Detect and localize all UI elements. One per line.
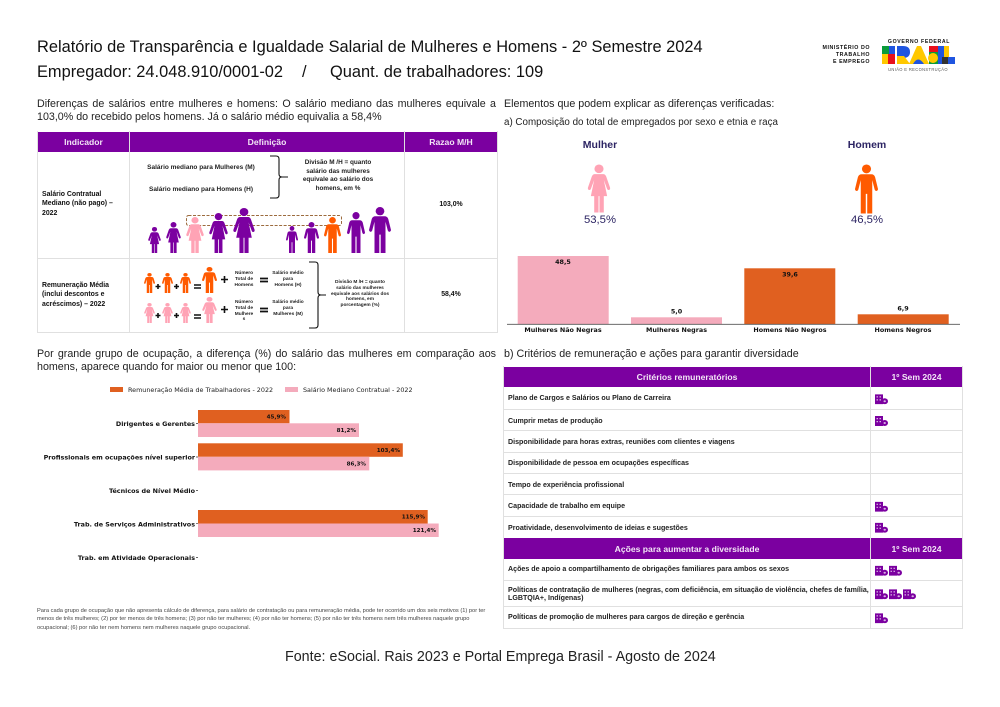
row: promoção: Políticas de promoção de mulheres para cargos de direção e gerência — [508, 613, 744, 621]
table header: ações — [504, 538, 870, 559]
value: 53,5%: 53,5% — [584, 214, 616, 226]
definition text: divisão: Divisão M /H = quanto — [305, 159, 371, 166]
formula text: salário médio homens — [272, 270, 304, 288]
chart legend: Remuneração Média de Trabalhadores - 2022 — [128, 386, 273, 394]
row label: salário contratual: Salário Contratual — [42, 190, 101, 198]
row: plano de cargos: Plano de Cargos e Salários ou Plano de Carreira — [508, 394, 671, 402]
heading: occupation groups: homens, aparece quando for maior ou menor que 100: — [37, 361, 296, 373]
definition text: divisão: equivale ao salário dos — [303, 176, 373, 183]
ministry logo text: TRABALHO — [836, 52, 870, 58]
footnote: menos de três mulheres; (2) por ter menos de três homens; (3) por não ter mulheres; (4) por não ter homens; (5) por não ter três homens nem três mulheres naquele grupo — [37, 616, 469, 622]
column chart: composition: Homens Não Negros — [753, 326, 827, 334]
icons: table markers — [875, 394, 916, 624]
panel: indicator table — [37, 131, 498, 333]
formula text: salário médio homens: para — [283, 277, 293, 282]
row label: salário contratual — [42, 190, 113, 216]
formula text: divisão — [331, 280, 389, 308]
intro text: salary differences: 103,0% do recebido pelos homens. Já o salário médio equivalia a 58,4% — [37, 111, 382, 123]
chart legend: Salário Mediano Contratual - 2022 — [303, 386, 413, 394]
title: Relatório de Transparência e Igualdade Salarial de Mulheres e Homens - 2º Semestre 2024 — [37, 38, 703, 56]
table header: semestre 2: 1º Sem 2024 — [892, 544, 941, 554]
bar chart: occupation groups: 81,2% — [337, 428, 356, 434]
brace — [270, 156, 288, 198]
bar chart: occupation groups: Trab. em Atividade Operacionais — [78, 554, 195, 562]
formula text: salário médio mulheres: Salário médio — [272, 300, 304, 305]
row: contratação: LGBTQIA+, Indígenas) — [508, 594, 583, 602]
row: disponibilidade pessoa: Disponibilidade de pessoa em ocupações específicas — [508, 458, 689, 466]
chart legend — [110, 386, 413, 394]
title — [37, 38, 703, 81]
label: homem: Homem — [848, 139, 886, 151]
bar chart: occupation groups: Dirigentes e Gerentes — [116, 420, 195, 428]
formula text: divisão: Divisão M /H = quanto — [335, 280, 385, 285]
bar chart: occupation groups: 121,4% — [413, 528, 436, 534]
formula text: salário médio mulheres: Mulheres (M) — [273, 312, 303, 317]
table header: indicador — [38, 132, 129, 152]
column chart: composition: 5,0 — [671, 307, 683, 315]
formula text: número total de homens: Número — [235, 271, 253, 276]
formula text: número total de homens: Total de — [235, 277, 253, 282]
bar chart: occupation groups: Técnicos de Nível Médio — [109, 487, 196, 495]
ministry logo text — [822, 44, 870, 65]
formula text: número total de mulheres — [235, 300, 253, 322]
heading: occupation groups — [37, 348, 496, 373]
column chart: composition: 39,6 — [782, 270, 798, 278]
column chart: composition: Mulheres Não Negras — [524, 326, 602, 334]
intro text: salary differences: Diferenças de salários entre mulheres e homens: O salário mediano das mulheres equivale a — [37, 98, 496, 110]
subheading b: b) Critérios de remuneração e ações para garantir diversidade — [504, 348, 799, 360]
brace 2 — [309, 262, 326, 328]
label: mulher: Mulher — [583, 139, 617, 151]
row: capacidade: Capacidade de trabalho em equipe — [508, 502, 625, 510]
formula text: divisão: equivale aos salários dos — [331, 292, 389, 297]
government logo — [882, 39, 955, 72]
formula text: número total de mulheres: Número — [235, 300, 253, 305]
definition text: divisão: salário das mulheres — [306, 168, 370, 175]
ministry logo text: E EMPREGO — [833, 59, 870, 65]
table header: ações: Ações para aumentar a diversidade — [615, 544, 759, 554]
bar chart: occupation groups — [44, 410, 439, 562]
table header: razão — [405, 132, 497, 152]
formula text: divisão: porcentagem (%) — [341, 303, 379, 308]
column chart: composition: 48,5 — [555, 258, 571, 266]
heading: occupation groups: Por grande grupo de ocupação, a diferença (%) do salário das mulheres em comparação aos — [37, 348, 496, 360]
icons: men average formula — [144, 267, 228, 293]
table header: semestre — [871, 367, 962, 387]
table header: definição: Definição — [248, 137, 286, 147]
value: 46,5%: 46,5% — [851, 214, 883, 226]
row label: remuneração média: Remuneração Média (inclui descontos e acréscimos) – 2022 — [42, 282, 109, 308]
heading: elements: Elementos que podem explicar as diferenças verificadas: — [504, 98, 774, 110]
government logo: UNIÃO E RECONSTRUÇÃO — [888, 67, 948, 72]
government logo: GOVERNO FEDERAL — [888, 39, 950, 45]
row: metas: Cumprir metas de produção — [508, 416, 603, 424]
row label: salário contratual: Mediano (não pago) – — [42, 200, 113, 207]
row: contratação — [508, 586, 869, 602]
table header: critérios: Critérios remuneratórios — [637, 372, 737, 382]
intro text: salary differences — [37, 98, 496, 123]
title: Quant. de trabalhadores: 109 — [330, 63, 543, 81]
title: Empregador: 24.048.910/0001-02 — [37, 63, 283, 81]
row: experiência: Tempo de experiência profissional — [508, 480, 624, 488]
bar chart: occupation groups: 45,9% — [267, 415, 286, 421]
formula text: divisão: salário das mulheres — [336, 286, 384, 291]
table header: indicador: Indicador — [64, 137, 103, 147]
icons: women and men salary ranking — [148, 207, 391, 253]
formula text: número total de mulheres: Mulhere — [235, 312, 253, 317]
subheading a: a) Composição do total de empregados por sexo e etnia e raça — [504, 117, 778, 128]
formula text: salário médio mulheres — [272, 300, 304, 317]
formula text: número total de homens — [234, 270, 254, 288]
panel: criteria table — [503, 366, 963, 629]
table header: definição — [130, 132, 404, 152]
formula text: salário médio homens: Salário médio — [272, 271, 304, 276]
formula text: divisão: homens, em — [346, 297, 374, 302]
icon: man — [855, 164, 878, 214]
definition text: mulheres: Salário mediano para Mulheres (M) — [147, 164, 255, 170]
icon: woman — [588, 164, 610, 212]
footnote — [37, 608, 486, 631]
bar chart: occupation groups: Profissionais em ocupações nível superior — [44, 454, 196, 462]
source: Fonte: eSocial. Rais 2023 e Portal Emprega Brasil - Agosto de 2024 — [285, 649, 716, 665]
formula text: salário médio homens: Homens (H) — [275, 283, 301, 288]
ministry logo text: MINISTÉRIO DO — [823, 45, 870, 51]
column chart: composition — [507, 256, 960, 334]
value: razão remuneração: 58,4% — [441, 291, 461, 298]
title: / — [302, 63, 307, 81]
value: razão salário contratual: 103,0% — [439, 201, 463, 208]
definition text: divisão — [303, 159, 373, 192]
table header: razão: Razao M/H — [429, 137, 473, 147]
footnote: ocupacional; (6) por não ter nem homens nem mulheres naquele grupo ocupacional. — [37, 625, 250, 631]
column chart: composition: Homens Negros — [875, 326, 932, 334]
bar chart: occupation groups: 103,4% — [377, 448, 400, 454]
bar chart: occupation groups: 86,3% — [347, 462, 366, 468]
dashed highlight — [186, 215, 342, 226]
definition text: divisão: homens, em % — [316, 185, 360, 192]
table header: critérios — [504, 367, 870, 387]
row label: salário contratual: 2022 — [42, 210, 57, 216]
row: apoio: Ações de apoio a compartilhamento de obrigações familiares para ambos os sexos — [508, 565, 789, 573]
icons: women average formula — [144, 297, 228, 323]
formula text: número total de mulheres: Total de — [235, 306, 253, 311]
bar chart: occupation groups: Trab. de Serviços Administrativos — [74, 520, 195, 528]
row: contratação: Políticas de contratação de mulheres (negras, com deficiência, em situação de violência, chefes de família, — [508, 586, 869, 594]
formula text: número total de homens: Homens — [235, 283, 253, 288]
column chart: composition: 6,9 — [897, 304, 909, 312]
table header: semestre: 1º Sem 2024 — [892, 372, 941, 382]
row: disponibilidade horas: Disponibilidade para horas extras, reuniões com clientes e viagens — [508, 438, 735, 446]
equals signs — [260, 278, 268, 312]
formula text: número total de mulheres: s — [243, 317, 245, 322]
table header: semestre 2 — [871, 538, 962, 559]
column chart: composition: Mulheres Negras — [646, 326, 707, 334]
bar chart: occupation groups: 115,9% — [402, 515, 425, 521]
definition text: homens: Salário mediano para Homens (H) — [149, 186, 253, 192]
footnote: Para cada grupo de ocupação que não apresenta cálculo de diferença, para salário de contratação ou para remuneração média, pode ter ocorrido um dos seis motivos (1) por ter — [37, 608, 485, 614]
formula text: salário médio mulheres: para — [283, 306, 293, 311]
row: proatividade: Proatividade, desenvolvimento de ideias e sugestões — [508, 524, 688, 532]
